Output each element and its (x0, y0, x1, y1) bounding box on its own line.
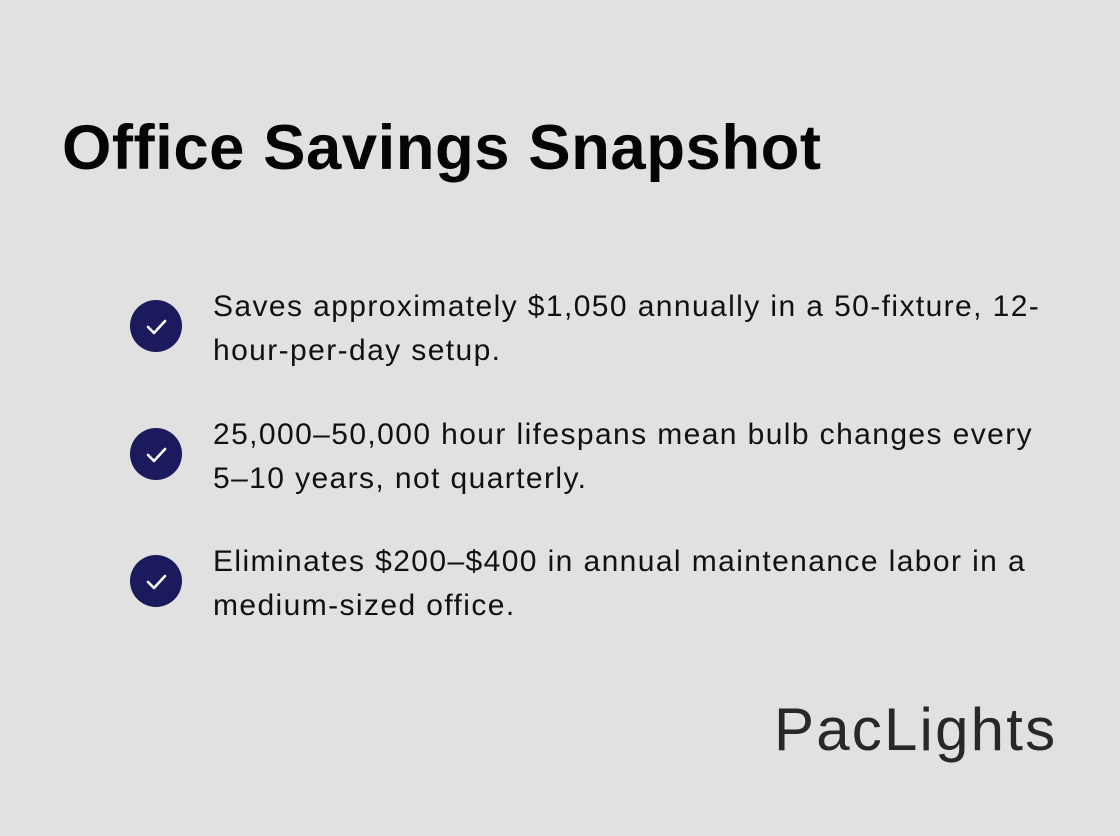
text: savings: hour-per-day setup. (213, 334, 501, 367)
icon: check circle (130, 428, 182, 480)
text: maintenance: medium-sized office. (213, 589, 516, 622)
item: lifespan (130, 418, 1033, 495)
text: lifespan: 25,000–50,000 hour lifespans mean bulb changes every (213, 418, 1033, 451)
text: savings: Saves approximately $1,050 annually in a 50-fixture, 12- (213, 290, 1040, 323)
icon: check circle (130, 300, 182, 352)
text: maintenance (213, 545, 1026, 622)
icon: check circle (130, 555, 182, 607)
text: maintenance: Eliminates $200–$400 in annual maintenance labor in a (213, 545, 1026, 578)
text: lifespan (213, 418, 1033, 495)
item: maintenance (130, 545, 1026, 622)
title: Office Savings Snapshot (62, 113, 822, 183)
text: savings (213, 290, 1040, 367)
logo: PacLights: PacLights (774, 696, 1057, 763)
text: lifespan: 5–10 years, not quarterly. (213, 462, 587, 495)
item: annual savings (130, 290, 1040, 367)
